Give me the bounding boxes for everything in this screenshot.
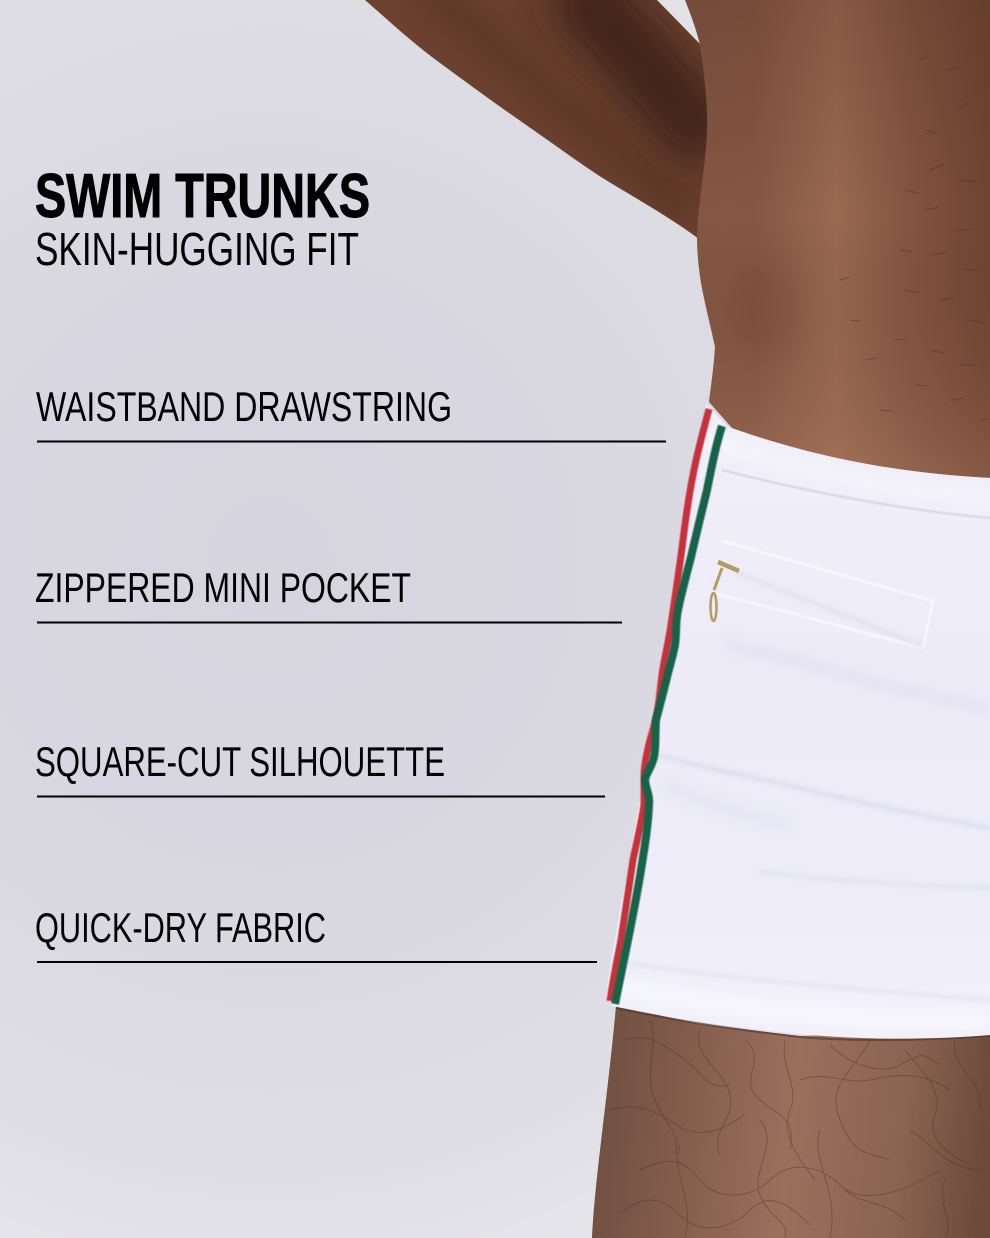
red side stripe xyxy=(610,409,709,1001)
gold zipper pull xyxy=(710,562,739,621)
title: SWIM TRUNKS xyxy=(35,162,370,231)
waistband seam xyxy=(722,470,990,518)
torso shading xyxy=(685,0,990,478)
pocket stitching xyxy=(718,541,933,648)
feature: zippered mini pocket: ZIPPERED MINI POCKET xyxy=(35,564,411,611)
pocket opening shadow xyxy=(735,572,923,646)
feature: waistband drawstring: WAISTBAND DRAWSTRING xyxy=(36,383,452,430)
torso muscle shadow xyxy=(731,260,799,360)
fold shadows and highlights xyxy=(636,507,989,888)
hem seam xyxy=(622,962,990,1000)
thigh xyxy=(592,1006,990,1238)
thigh shadow under hem xyxy=(616,1008,990,1040)
raised arm xyxy=(360,0,720,245)
trunks body xyxy=(606,404,990,1039)
torso hair xyxy=(840,55,988,420)
subtitle: SKIN-HUGGING FIT xyxy=(35,223,359,275)
thigh hair texture xyxy=(610,1020,985,1238)
photo: model torso and arm xyxy=(360,0,990,1238)
feature: square-cut silhouette: SQUARE-CUT SILHOUETTE xyxy=(35,738,445,785)
pocket xyxy=(710,541,933,648)
green side stripe xyxy=(615,426,722,1004)
torso xyxy=(685,0,990,478)
feature: quick-dry fabric: QUICK-DRY FABRIC xyxy=(35,904,326,951)
trunks xyxy=(606,404,990,1039)
